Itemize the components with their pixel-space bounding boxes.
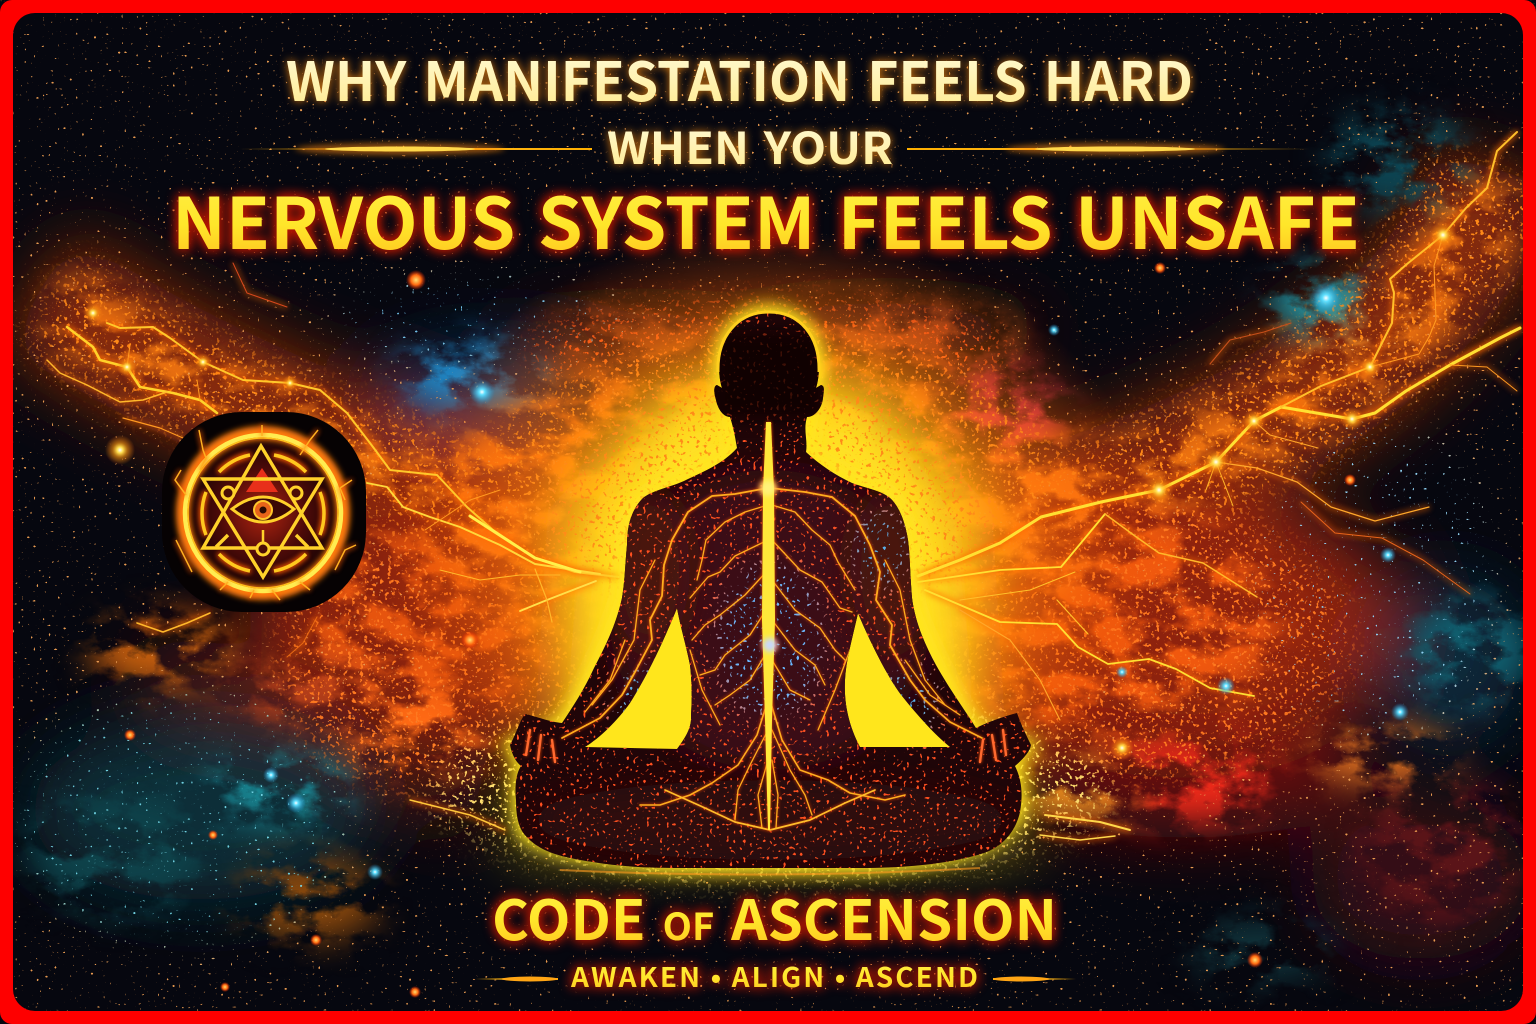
central radiant glow	[380, 230, 1160, 890]
figure: meditating silhouette with nervous system	[480, 300, 1060, 890]
figure: head halo arc	[718, 312, 819, 372]
title divider right	[907, 143, 1310, 155]
title line 2: WHEN YOUR	[607, 113, 893, 177]
background: soft nebula colour wash	[30, 170, 1530, 960]
logo: dark badge	[162, 412, 366, 612]
logo: eye in hexagram badge	[162, 412, 366, 612]
logo: hexagram	[203, 446, 322, 577]
ground glow line	[560, 868, 980, 875]
logo: inner arcs	[202, 455, 324, 571]
title line 3: NERVOUS SYSTEM FEELS UNSAFE	[172, 168, 1360, 270]
logo: inner disk	[189, 439, 337, 587]
lightning: left wing	[47, 263, 619, 657]
title line 1: WHY MANIFESTATION FEELS HARD	[286, 38, 1193, 117]
logo: eye	[232, 497, 294, 543]
figure: outer aura	[510, 311, 1031, 868]
tagline divider left	[475, 976, 558, 982]
figure: glowing spine	[760, 422, 777, 830]
brand block	[475, 876, 1076, 995]
title	[172, 38, 1360, 270]
lightning: right wing	[410, 132, 1520, 840]
bright stars	[83, 221, 1457, 998]
logo: fiery ring	[183, 433, 343, 593]
title divider left	[240, 143, 592, 155]
brand name: CODE OF ASCENSION	[492, 876, 1057, 956]
background: dense embers along the energy bands	[50, 170, 1490, 790]
tagline: AWAKEN • ALIGN • ASCEND	[570, 956, 980, 995]
logo: small circles	[222, 487, 302, 555]
glow sparks and streaks	[430, 340, 1110, 880]
logo: red triangle	[246, 468, 278, 492]
tagline divider right	[993, 976, 1076, 982]
figure: nerve branches	[526, 488, 1006, 830]
logo: lightning cracks	[175, 425, 356, 600]
figure: body	[510, 314, 1031, 868]
